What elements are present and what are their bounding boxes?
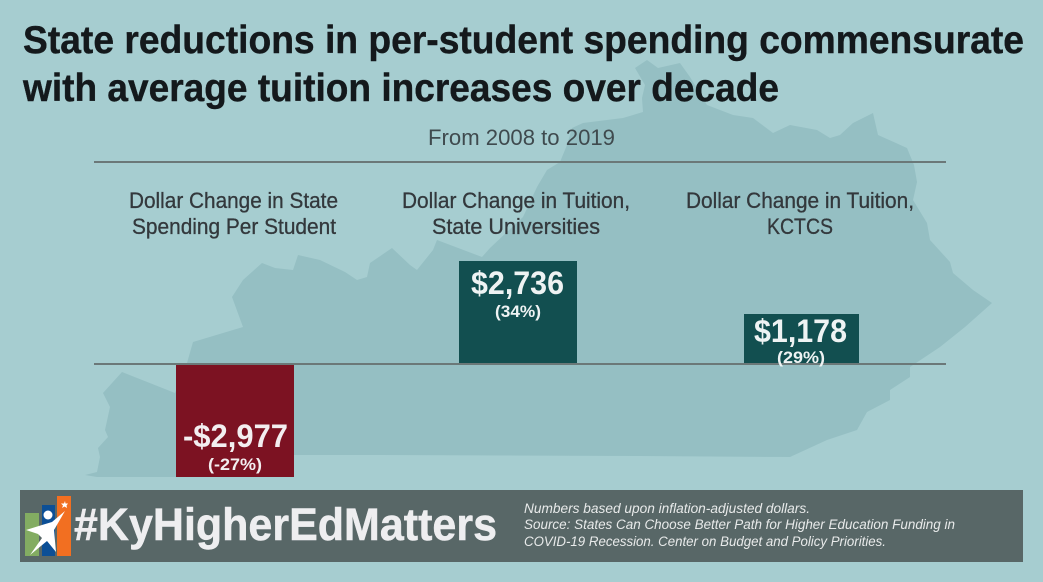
title: State reductions in per-student spending commensurate — [23, 19, 1024, 62]
column heading: university tuition: State Universities — [432, 214, 600, 239]
value label: KCTCS tuition: $1,178 — [754, 313, 847, 349]
value label: KCTCS tuition: (29%) — [777, 348, 825, 367]
value label: state spending — [183, 418, 288, 474]
value label: university tuition: $2,736 — [471, 265, 564, 301]
source note: Source: States Can Choose Better Path for Higher Education Funding in — [524, 517, 955, 532]
value label: KCTCS tuition — [754, 313, 847, 367]
subtitle: date range: From 2008 to 2019 — [428, 125, 615, 150]
column heading: state spending: Spending Per Student — [132, 214, 337, 239]
column heading: KCTCS tuition: Dollar Change in Tuition, — [686, 188, 914, 213]
value label: state spending: (-27%) — [208, 455, 262, 474]
column heading: university tuition: Dollar Change in Tuition, — [402, 188, 630, 213]
column heading: state spending: Dollar Change in State — [129, 188, 338, 213]
background map: Kentucky silhouette — [85, 60, 992, 477]
column heading: state spending — [129, 188, 338, 239]
value label: university tuition — [471, 265, 564, 321]
bar: KCTCS tuition change — [744, 314, 859, 363]
hashtag: #KyHigherEdMatters — [74, 499, 497, 550]
title: with average tuition increases over decade — [22, 67, 779, 110]
title — [22, 19, 1024, 110]
footer band — [20, 490, 1023, 562]
column heading: university tuition — [402, 188, 630, 239]
column heading: KCTCS tuition — [686, 188, 914, 239]
baseline axis — [94, 363, 946, 365]
top divider — [94, 161, 946, 163]
bar: university tuition change — [459, 261, 577, 363]
column heading: KCTCS tuition: KCTCS — [767, 214, 833, 239]
value label: state spending: -$2,977 — [183, 418, 288, 454]
source note: Numbers based upon inflation-adjusted dollars. — [524, 501, 810, 516]
icon: logo with figure and star — [25, 496, 71, 556]
source note: COVID-19 Recession. Center on Budget and Policy Priorities. — [524, 534, 886, 549]
source note — [524, 501, 955, 549]
value label: university tuition: (34%) — [495, 302, 541, 321]
bar: state spending change — [176, 364, 294, 477]
